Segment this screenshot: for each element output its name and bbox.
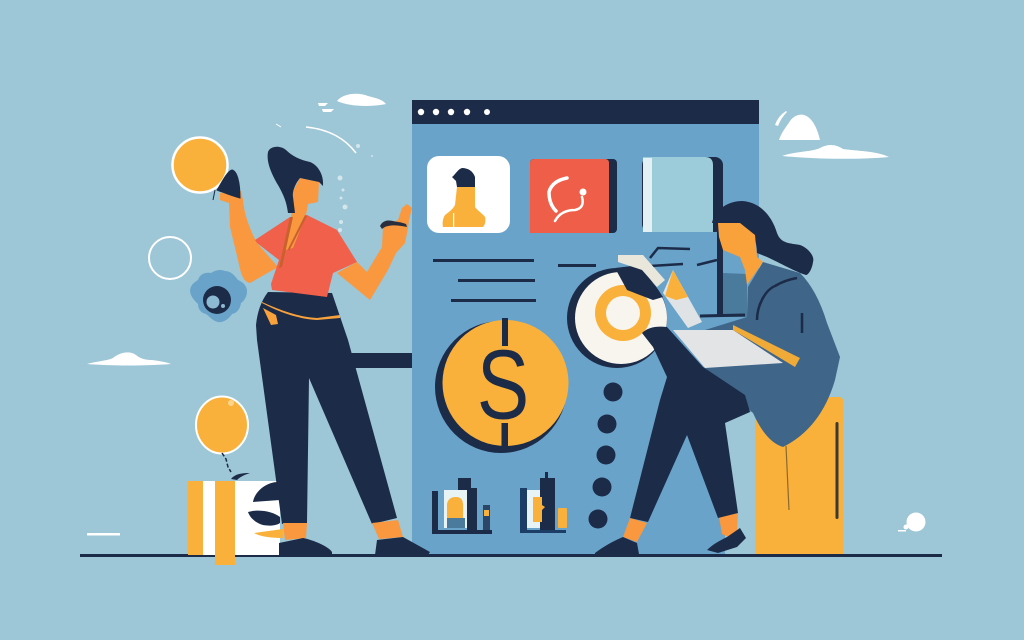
shoes	[595, 528, 746, 554]
tile: person	[427, 156, 510, 233]
panel: app window	[412, 100, 759, 554]
cloud: top centre	[318, 94, 386, 112]
hair	[268, 147, 323, 213]
coin with dollar	[435, 318, 568, 453]
window dots	[418, 109, 490, 115]
belt	[262, 302, 340, 325]
tile: glass	[642, 157, 723, 315]
right arm	[337, 204, 412, 300]
gift box	[188, 481, 283, 565]
neck strap	[279, 215, 307, 268]
left arm	[220, 191, 278, 283]
mini building icon left	[432, 478, 492, 534]
face and neck	[285, 178, 319, 250]
shoes	[279, 537, 430, 555]
legs	[630, 327, 750, 522]
open book	[673, 330, 783, 368]
light gap beside stool	[725, 412, 759, 554]
cloud: top right	[775, 111, 889, 159]
tile: red	[530, 159, 617, 233]
tablet	[663, 270, 702, 328]
book orange edge	[733, 325, 800, 367]
ankles	[283, 520, 403, 540]
sketch lines behind seated woman	[650, 248, 717, 266]
cloud: left	[87, 352, 171, 366]
ankles	[623, 513, 738, 542]
hand	[615, 265, 663, 300]
shirt	[255, 215, 357, 297]
text lines	[433, 259, 596, 302]
mini building icon right	[520, 472, 567, 533]
legs	[256, 292, 397, 524]
inner jacket line	[700, 315, 745, 316]
figure: seated woman	[595, 201, 840, 554]
balloon: yellow with string	[196, 396, 250, 480]
blue panel behind neck	[723, 250, 747, 317]
left hand phone	[213, 170, 240, 200]
outline circle	[149, 237, 191, 279]
hair	[712, 201, 813, 275]
decorative arc and specks near woman	[276, 124, 373, 232]
small cloud strokes and dots	[87, 512, 926, 536]
connector bar	[340, 353, 415, 368]
cuff	[618, 255, 665, 287]
face	[718, 223, 763, 285]
coin with dollar: S	[477, 330, 529, 439]
target disc	[567, 268, 667, 368]
vertical dots	[588, 382, 622, 528]
balloon: orange circle	[172, 138, 228, 192]
hand ring	[380, 221, 407, 229]
ground line	[80, 554, 942, 557]
figure: standing woman	[213, 147, 430, 555]
icon: blue gear blob	[190, 270, 247, 322]
jacket folds	[757, 278, 802, 333]
body jacket	[704, 262, 840, 447]
orange stool	[755, 397, 843, 554]
